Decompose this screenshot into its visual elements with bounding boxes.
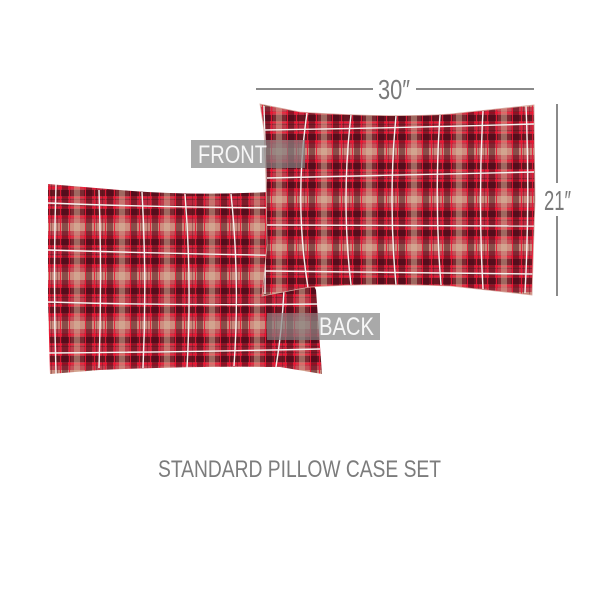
dimension: width 30 inches: 30″	[378, 74, 410, 105]
label: front: FRONT	[198, 141, 267, 169]
label: back	[267, 313, 380, 341]
infographic canvas	[48, 80, 571, 477]
pillow case: front (right)	[255, 100, 540, 300]
pillow case: back (left)	[48, 184, 322, 374]
title: product name: STANDARD PILLOW CASE SET	[158, 456, 441, 483]
dimension: height 21 inches: 21″	[544, 185, 571, 216]
label: back: BACK	[319, 313, 374, 341]
